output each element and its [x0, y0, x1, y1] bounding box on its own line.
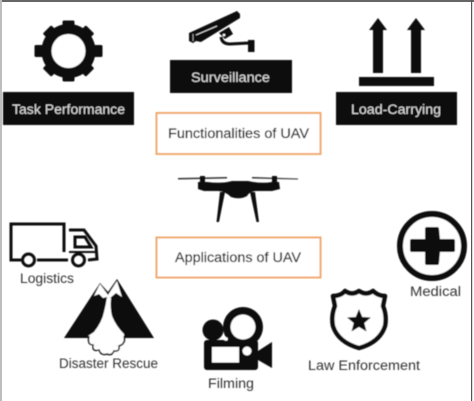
icon: truck — [11, 224, 97, 266]
icon: drone — [178, 176, 298, 222]
panel: filming — [202, 307, 272, 391]
icon: police badge — [332, 291, 386, 348]
icon: movie camera — [202, 307, 272, 370]
callout: applications of uav — [156, 238, 320, 278]
icon: gear — [34, 20, 102, 82]
label: medical: Medical — [410, 284, 461, 299]
label box: load-carrying — [336, 92, 457, 125]
panel: medical — [400, 214, 464, 299]
callout: functionalities of uav — [156, 113, 320, 154]
label: logistics: Logistics — [20, 271, 74, 286]
label: surveillance: Surveillance — [191, 70, 270, 85]
label: task performance: Task Performance — [12, 102, 125, 117]
panel: surveillance — [170, 11, 292, 93]
label box: surveillance — [170, 60, 292, 93]
panel: disaster rescue — [59, 279, 158, 371]
icon: up arrows over bar — [359, 18, 434, 86]
icon: security camera — [189, 11, 254, 52]
callout: functionalities of uav: Functionalities of UAV — [168, 126, 309, 141]
callout: applications of uav: Applications of UAV — [175, 250, 301, 265]
label: filming: Filming — [208, 376, 254, 391]
label: law enforcement: Law Enforcement — [308, 358, 420, 373]
icon: medical cross — [400, 214, 464, 278]
label box: task performance — [3, 92, 134, 125]
label: disaster rescue: Disaster Rescue — [59, 356, 158, 371]
label: load-carrying: Load-Carrying — [351, 102, 441, 117]
panel: law enforcement — [308, 291, 420, 373]
panel: logistics — [11, 224, 97, 286]
panel: load-carrying — [336, 18, 457, 125]
icon: mountain with avalanche — [64, 279, 154, 355]
panel: task performance — [3, 20, 134, 125]
